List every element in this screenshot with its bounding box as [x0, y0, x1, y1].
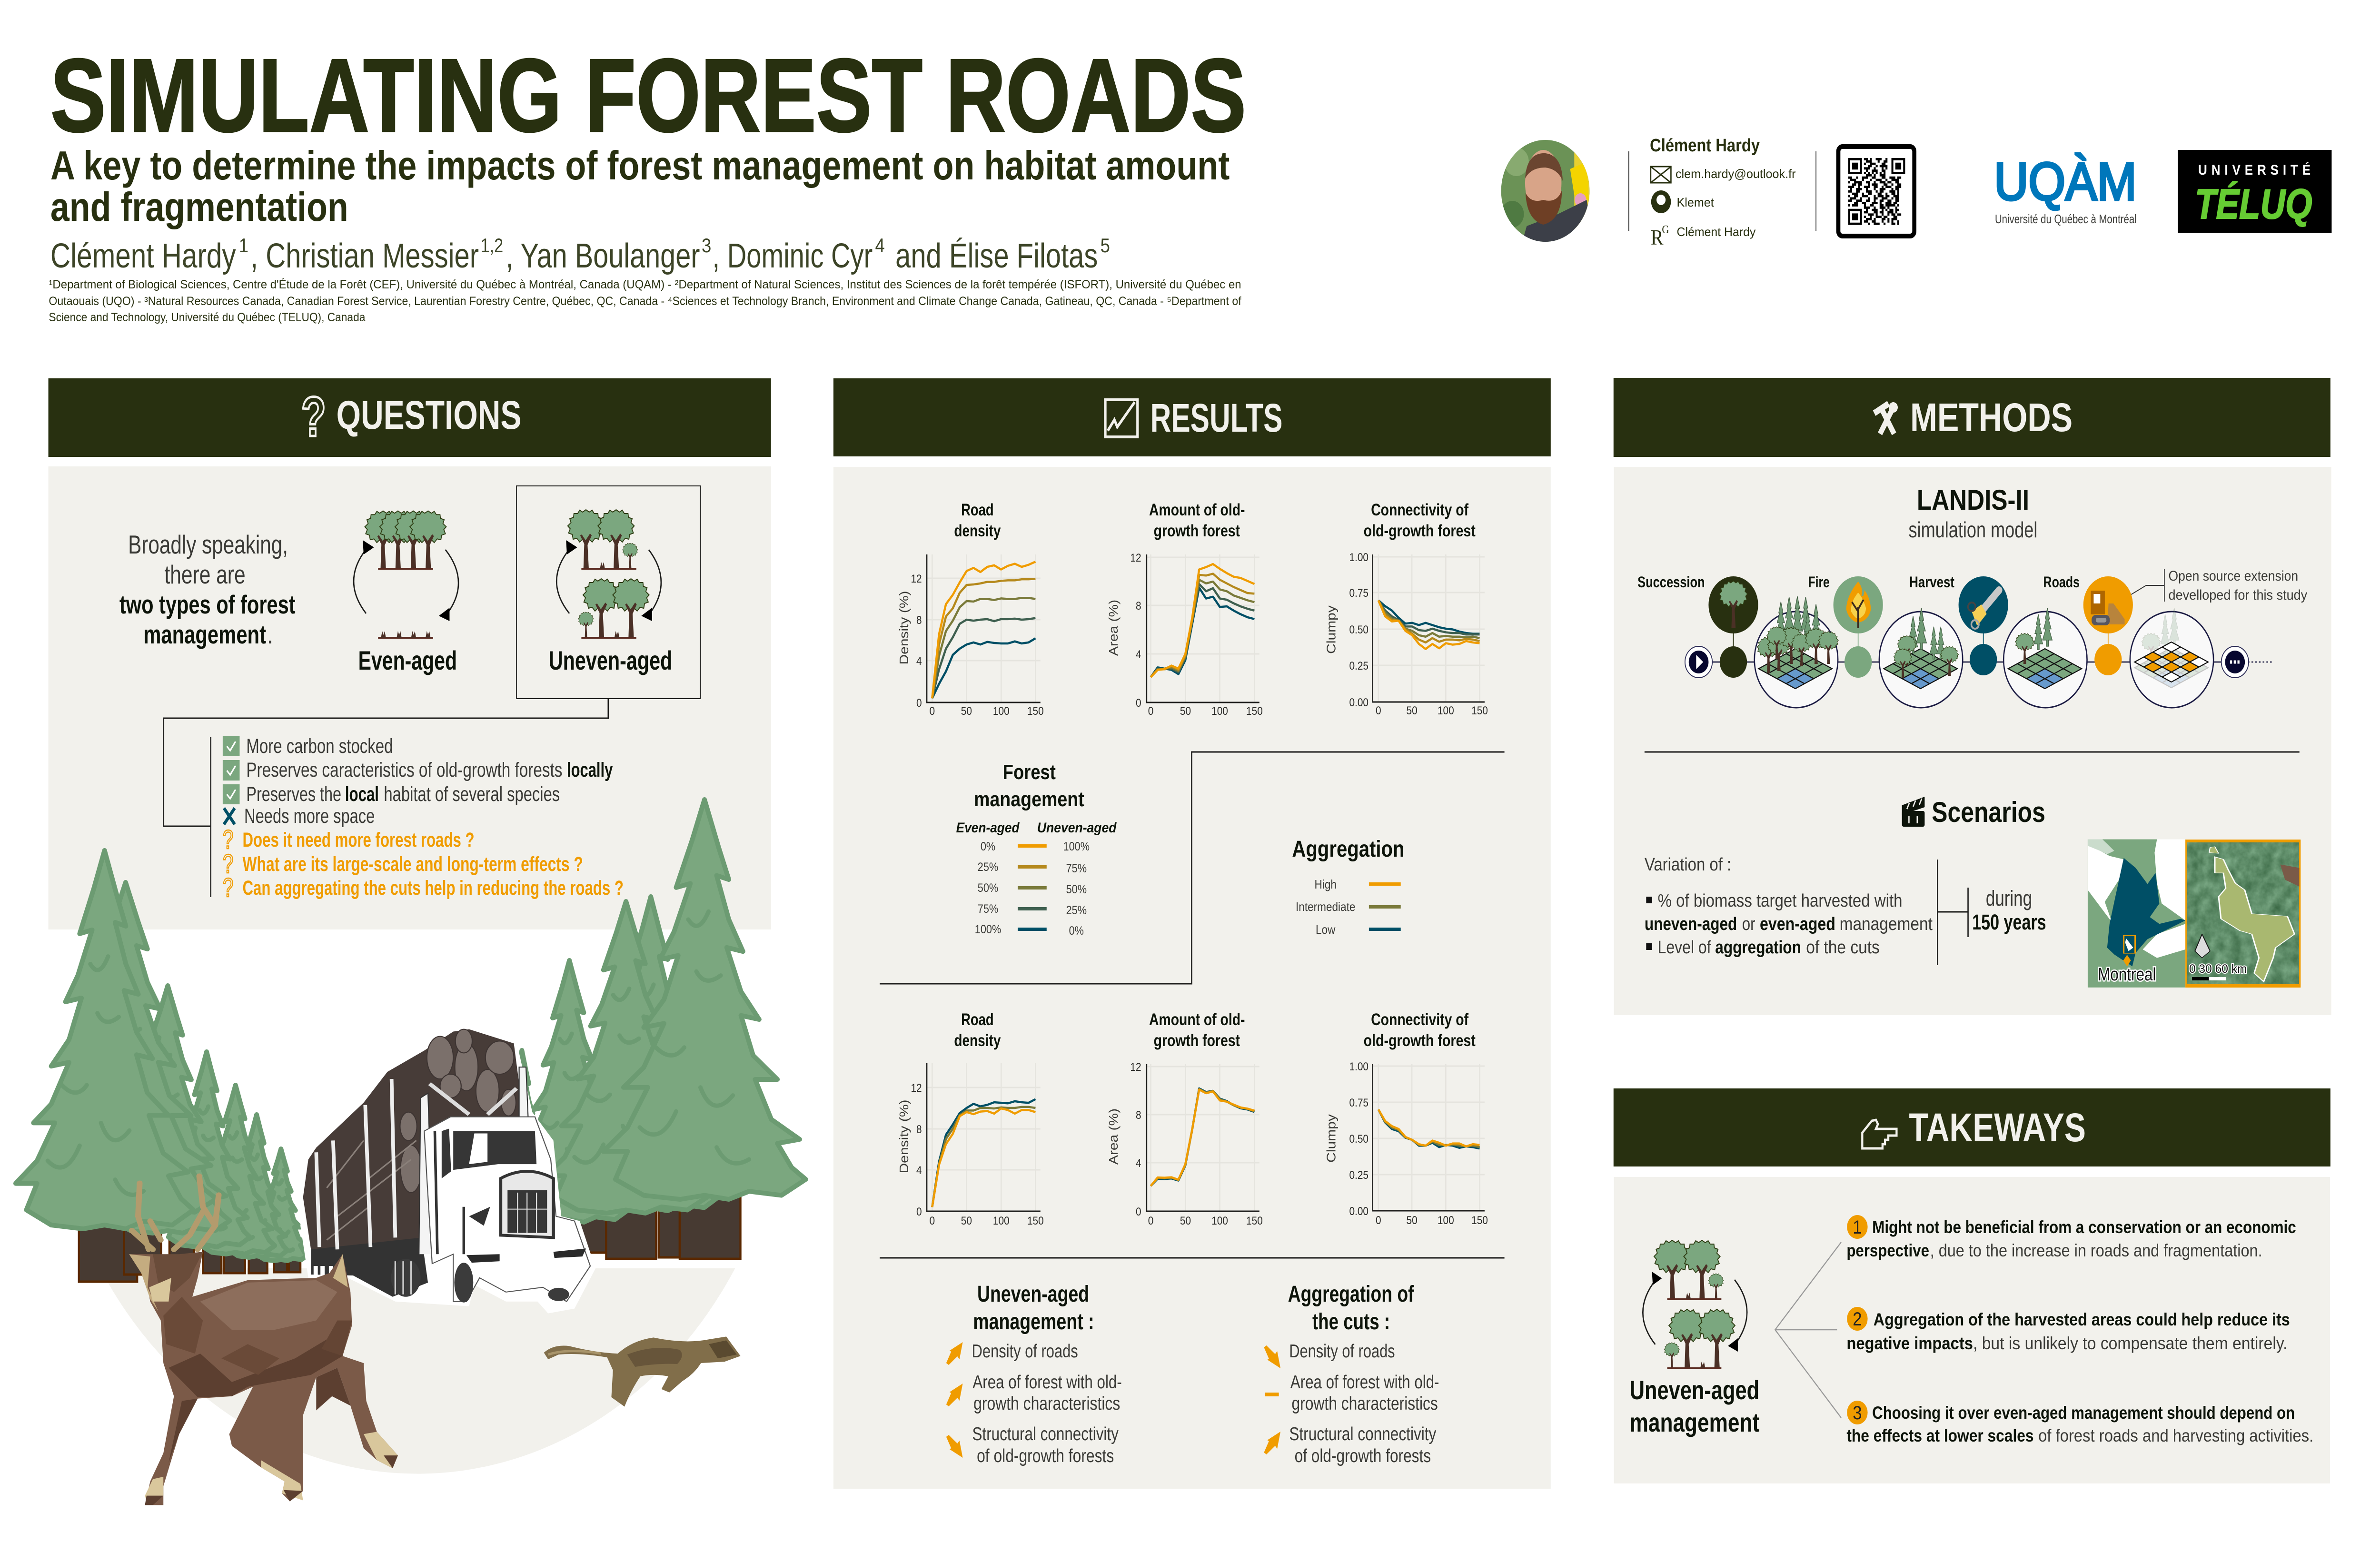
- list: pros and cons: Preserves caracteristics of old-growth forests: [246, 759, 562, 781]
- bracket and duration: [1937, 860, 2046, 965]
- extension note: [2131, 568, 2307, 603]
- legend: forest management: 50%: [1066, 883, 1087, 896]
- chart: road density, forest management: 0: [930, 705, 935, 717]
- list: research questions: ?: [223, 825, 233, 855]
- stage: fire: [1808, 574, 1883, 678]
- chart: road density, forest management: 4: [916, 655, 922, 667]
- chart: amount of old-growth forest, aggregation: 50: [1180, 1215, 1191, 1227]
- model name: LANDIS-II: [1917, 484, 2029, 516]
- takeaway 3: the effects at lower scales: [1846, 1426, 2034, 1446]
- stage: harvest: [1909, 574, 2008, 675]
- uneven-aged box: Uneven-aged: [549, 646, 672, 676]
- chart: road density, aggregation: 0: [916, 1206, 922, 1218]
- chart: connectivity, aggregation: 0: [1376, 1214, 1381, 1226]
- takeaways subject label: [1630, 1376, 1759, 1438]
- takeaways subject label: Uneven-aged: [1630, 1376, 1759, 1405]
- summary: uneven-aged management: Uneven-aged: [977, 1281, 1089, 1307]
- panel: results: [833, 378, 1551, 1489]
- uneven-aged box: [516, 486, 700, 699]
- takeaway 2: Aggregation of the harvested areas could help reduce its: [1874, 1310, 2290, 1330]
- bracket and duration: during: [1986, 886, 2032, 910]
- chart: amount of old-growth forest, aggregation: 100: [1211, 1215, 1228, 1227]
- list: research questions: [223, 825, 624, 903]
- scenarios text: Variation of :: [1645, 854, 1731, 875]
- icon: even-aged cycle: [354, 511, 458, 638]
- contact details: [1629, 135, 1816, 250]
- chart: road density, aggregation: 0: [930, 1215, 935, 1227]
- takeaway 2: negative impacts: [1846, 1334, 1973, 1354]
- takeaway 1: [1846, 1215, 2296, 1261]
- chart: road density, forest management: 50: [961, 705, 972, 717]
- authors: 5: [1101, 235, 1110, 257]
- authors: 1: [239, 235, 248, 257]
- bracket and duration: 150 years: [1972, 910, 2046, 934]
- list: pros and cons: habitat of several species: [384, 783, 560, 806]
- illustration: right forest: [493, 800, 806, 1259]
- list: pros and cons: Needs more space: [244, 805, 375, 828]
- legend: aggregation: Intermediate: [1296, 900, 1355, 914]
- chart: amount of old-growth forest, aggregation: 0: [1136, 1206, 1141, 1218]
- chart: connectivity, aggregation: 0.00: [1349, 1205, 1368, 1217]
- takeaway 3: 3: [1853, 1402, 1862, 1423]
- intro text: Broadly speaking,: [128, 530, 288, 559]
- chart: connectivity, aggregation: 0.75: [1349, 1097, 1368, 1109]
- contact details: Clément Hardy: [1677, 226, 1756, 239]
- contact details: R: [1651, 226, 1664, 250]
- chart: connectivity, forest management: 1.00: [1349, 551, 1368, 563]
- chart titles: bottom row: growth forest: [1154, 1031, 1240, 1049]
- chart: connectivity, aggregation: 50: [1407, 1214, 1418, 1226]
- chart: connectivity, forest management: 0.25: [1349, 660, 1368, 672]
- questions heading: QUESTIONS: [337, 393, 521, 437]
- contact details: G: [1662, 223, 1669, 236]
- chart titles: bottom row: density: [954, 1031, 1001, 1049]
- summary: uneven-aged management: management :: [973, 1308, 1094, 1334]
- stage: harvest: Harvest: [1909, 574, 1954, 591]
- summary: uneven-aged management: [946, 1281, 1122, 1466]
- chart: connectivity, forest management: 0.00: [1349, 696, 1368, 709]
- legend: forest management: [956, 760, 1117, 937]
- chart: amount of old-growth forest, aggregation: 8: [1136, 1109, 1141, 1121]
- stage: roads: [2043, 574, 2133, 675]
- map: study area: 0 30 60 km: [2189, 962, 2247, 975]
- even-aged label: Even-aged: [358, 646, 457, 676]
- scenarios text: aggregation: [1715, 937, 1801, 958]
- stage: roads: Roads: [2043, 574, 2080, 591]
- legend: forest management: 25%: [978, 860, 998, 873]
- summary: aggregation of the cuts: Aggregation of: [1288, 1281, 1414, 1307]
- legend: forest management: 0%: [1069, 924, 1084, 937]
- chart titles: top row: [954, 500, 1476, 540]
- chart: connectivity, aggregation: 1.00: [1349, 1060, 1368, 1073]
- model name: simulation model: [1909, 518, 2037, 543]
- stage: succession: [1637, 574, 1758, 678]
- summary: uneven-aged management: Density of roads: [972, 1341, 1078, 1362]
- list: pros and cons: More carbon stocked: [246, 735, 393, 758]
- divider: [880, 1257, 1505, 1258]
- chart: amount of old-growth forest, forest management: 4: [1136, 648, 1141, 661]
- takeaways heading: [1614, 1088, 2330, 1166]
- illustration: left forest: [16, 850, 308, 1282]
- chart: road density, aggregation: 100: [993, 1215, 1010, 1227]
- logo: TELUQ: UNIVERSITÉ: [2198, 162, 2311, 178]
- scenarios text: or: [1742, 914, 1755, 934]
- questions heading: [49, 378, 771, 457]
- chart: connectivity, forest management: 50: [1407, 704, 1418, 717]
- chart: amount of old-growth forest, forest management: [1107, 552, 1263, 717]
- takeaways subject label: management: [1630, 1408, 1759, 1438]
- illustration: logging truck: [300, 1026, 595, 1314]
- legend: forest management: Forest: [1003, 760, 1056, 784]
- scenarios text: Level of: [1658, 937, 1711, 958]
- chart: connectivity, forest management: 0: [1376, 704, 1381, 717]
- chart titles: top row: Connectivity of: [1371, 500, 1468, 519]
- landscape 3: [2003, 608, 2087, 708]
- subtitle: [50, 143, 1230, 229]
- authors: , Dominic Cyr: [713, 237, 873, 275]
- contact details: Klemet: [1677, 196, 1714, 209]
- authors: 1,2: [481, 235, 503, 257]
- list: research questions: ?: [223, 873, 233, 903]
- summary: aggregation of the cuts: Structural connectivity: [1289, 1423, 1437, 1444]
- results heading: RESULTS: [1150, 395, 1282, 440]
- summary: aggregation of the cuts: growth characteristics: [1292, 1393, 1438, 1414]
- takeaway 3: Choosing it over even-aged management should depend on: [1872, 1404, 2295, 1423]
- chart: amount of old-growth forest, forest management: 0: [1148, 705, 1153, 717]
- legend: forest management: 50%: [978, 881, 998, 894]
- landscape 1: [1755, 596, 1838, 708]
- end node: [2221, 646, 2249, 678]
- list: pros and cons: Preserves the: [246, 783, 341, 806]
- icon: uneven-aged cycle: [1643, 1240, 1747, 1368]
- scenarios text: management: [1840, 914, 1933, 934]
- authors: Clément Hardy: [50, 237, 236, 275]
- intro text: there are: [164, 560, 246, 589]
- takeaway 2: , but is unlikely to compensate them entirely.: [1973, 1334, 2288, 1354]
- authors: 4: [875, 235, 885, 257]
- contact details: Clément Hardy: [1650, 135, 1760, 156]
- legend: aggregation: [1292, 836, 1405, 937]
- chart: connectivity, aggregation: 0.25: [1349, 1169, 1368, 1181]
- scenarios text: of the cuts: [1806, 937, 1880, 958]
- chart: road density, aggregation: 12: [911, 1082, 922, 1094]
- subtitle: A key to determine the impacts of forest management on habitat amount: [50, 143, 1230, 188]
- chart: road density, aggregation: [897, 1063, 1044, 1227]
- affiliations: [49, 278, 1241, 324]
- chart: connectivity, forest management: Clumpy: [1324, 605, 1338, 654]
- authors: and Élise Filotas: [895, 237, 1098, 275]
- chart: road density, aggregation: 150: [1027, 1215, 1044, 1227]
- legend: forest management: Even-aged: [956, 820, 1020, 835]
- affiliations: ¹Department of Biological Sciences, Centre d'Étude de la Forêt (CEF), Université du Québec à Montréal, Canada (UQAM) - ²Department of Natural Sciences, Institut des Sciences de la forêt tempérée (ISFORT), Université du Québec en: [49, 278, 1241, 291]
- illustration: deer: [129, 1176, 398, 1505]
- chart: amount of old-growth forest, forest management: 12: [1130, 552, 1141, 564]
- chart: road density, forest management: Density (%): [897, 591, 911, 664]
- summary: aggregation of the cuts: of old-growth forests: [1295, 1445, 1431, 1466]
- chart: connectivity, aggregation: [1324, 1060, 1488, 1226]
- chart: amount of old-growth forest, aggregation: 0: [1148, 1215, 1153, 1227]
- chart: amount of old-growth forest, forest management: 150: [1246, 705, 1263, 717]
- methods heading: METHODS: [1910, 395, 2073, 440]
- chart: amount of old-growth forest, forest management: Area (%): [1107, 600, 1121, 656]
- legend: forest management: 100%: [975, 923, 1001, 936]
- chart titles: top row: growth forest: [1154, 521, 1240, 540]
- takeaway 1: , due to the increase in roads and fragmentation.: [1930, 1241, 2262, 1261]
- list: research questions: Can aggregating the cuts help in reducing the roads ?: [243, 877, 624, 900]
- chart: road density, forest management: 8: [916, 614, 922, 626]
- timeline line: [1699, 633, 2273, 662]
- extension note: develloped for this study: [2169, 587, 2307, 603]
- chart: amount of old-growth forest, forest management: 100: [1211, 705, 1228, 717]
- illustration: marten: [544, 1336, 741, 1407]
- author photo: [1501, 140, 1590, 242]
- chart: road density, forest management: 12: [911, 573, 922, 585]
- play node: [1685, 646, 1712, 678]
- model name: [1909, 484, 2037, 543]
- chart: connectivity, aggregation: Clumpy: [1324, 1114, 1338, 1163]
- chart: connectivity, forest management: [1324, 551, 1488, 717]
- map: study area: [2185, 840, 2301, 988]
- chart: road density, aggregation: Density (%): [897, 1100, 911, 1173]
- chart: road density, forest management: [897, 554, 1044, 717]
- summary: uneven-aged management: growth characteristics: [973, 1393, 1120, 1414]
- chart: road density, forest management: 150: [1027, 705, 1044, 717]
- landscape 4: [2130, 608, 2213, 708]
- authors: 3: [702, 235, 711, 257]
- summary: aggregation of the cuts: Density of roads: [1289, 1341, 1395, 1362]
- fan connector: [1775, 1242, 1841, 1418]
- panel: methods: [1614, 378, 2331, 1015]
- stage: succession: Succession: [1637, 574, 1705, 591]
- legend: forest management: 75%: [978, 902, 998, 915]
- intro text: [119, 530, 296, 649]
- chart: road density, aggregation: 4: [916, 1164, 922, 1176]
- extension note: Open source extension: [2169, 568, 2298, 583]
- list: pros and cons: [223, 735, 613, 828]
- affiliations: Science and Technology, Université du Québec (TELUQ), Canada: [49, 311, 366, 324]
- chart titles: top row: old-growth forest: [1364, 521, 1476, 540]
- chart: connectivity, forest management: 0.50: [1349, 623, 1368, 636]
- summary: aggregation of the cuts: Area of forest with old-: [1290, 1372, 1439, 1393]
- connector: [164, 699, 608, 897]
- summary: aggregation of the cuts: the cuts :: [1312, 1308, 1390, 1334]
- legend: forest management: 25%: [1066, 904, 1087, 917]
- stage: fire: Fire: [1808, 574, 1830, 591]
- takeaway 1: 1: [1853, 1216, 1862, 1238]
- chart: amount of old-growth forest, aggregation: 4: [1136, 1157, 1141, 1169]
- affiliations: Outaouais (UQO) - ³Natural Resources Canada, Canadian Forest Service, Laurentian Forestry Centre, Québec, QC, Canada - ⁴Sciences et Technology Branch, Environment and Climate Change Canada, Gatineau, QC, Canada - ⁵Department of: [49, 295, 1241, 307]
- chart titles: bottom row: old-growth forest: [1364, 1031, 1476, 1049]
- chart: amount of old-growth forest, aggregation: Area (%): [1107, 1108, 1121, 1165]
- methods heading: [1614, 378, 2330, 457]
- chart: amount of old-growth forest, aggregation: [1107, 1061, 1263, 1227]
- list: pros and cons: locally: [567, 759, 613, 781]
- intro text: two types of forest: [119, 590, 296, 619]
- legend: forest management: Uneven-aged: [1037, 820, 1117, 835]
- summary: aggregation of the cuts: [1264, 1281, 1439, 1466]
- map: Quebec location: [2088, 840, 2185, 988]
- logo: UQAM: UQÀM: [1994, 152, 2137, 212]
- chart: connectivity, forest management: 100: [1438, 704, 1454, 717]
- takeaway 2: 2: [1853, 1308, 1862, 1330]
- questions heading: ?: [301, 386, 326, 448]
- chart titles: bottom row: Connectivity of: [1371, 1010, 1468, 1028]
- legend: forest management: 100%: [1063, 840, 1090, 853]
- scenarios text: % of biomass target harvested with: [1658, 890, 1903, 911]
- chart: amount of old-growth forest, forest management: 8: [1136, 600, 1141, 612]
- authors: , Christian Messier: [250, 237, 479, 275]
- logo: UQAM: Université du Québec à Montréal: [1995, 213, 2137, 226]
- chart titles: bottom row: Road: [961, 1010, 994, 1028]
- list: research questions: ?: [223, 850, 233, 879]
- chart: amount of old-growth forest, aggregation: 150: [1246, 1215, 1263, 1227]
- chart titles: top row: Amount of old-: [1149, 500, 1245, 519]
- list: pros and cons: local: [345, 783, 379, 806]
- authors: [50, 235, 1110, 275]
- map: Quebec location: Montreal: [2098, 964, 2156, 985]
- legend: forest management: management: [974, 787, 1084, 811]
- scenarios heading: Scenarios: [1932, 796, 2045, 828]
- chart titles: top row: density: [954, 521, 1001, 540]
- chart titles: top row: Road: [961, 500, 994, 519]
- summary: uneven-aged management: Area of forest with old-: [972, 1372, 1122, 1393]
- chart titles: bottom row: Amount of old-: [1149, 1010, 1245, 1028]
- scenarios text: uneven-aged: [1645, 914, 1737, 934]
- logo: TELUQ: [2178, 150, 2331, 233]
- takeaway 3: of forest roads and harvesting activities.: [2038, 1426, 2313, 1446]
- chart: amount of old-growth forest, forest management: 0: [1136, 697, 1141, 709]
- subtitle: and fragmentation: [50, 184, 348, 229]
- scenarios text: even-aged: [1760, 914, 1835, 934]
- takeaway 2: [1846, 1307, 2290, 1354]
- takeaways heading: TAKEWAYS: [1909, 1105, 2086, 1150]
- takeaway 3: [1846, 1401, 2313, 1446]
- chart: road density, forest management: 0: [916, 697, 922, 709]
- results heading: [833, 378, 1551, 456]
- panel: takeaways: [1614, 1088, 2330, 1483]
- legend: aggregation: Low: [1316, 923, 1336, 937]
- chart: connectivity, aggregation: 150: [1471, 1214, 1488, 1226]
- intro text: .: [267, 620, 273, 649]
- intro text: management: [143, 620, 266, 649]
- legend: forest management: 0%: [981, 840, 995, 853]
- chart: road density, aggregation: 50: [961, 1215, 972, 1227]
- title: SIMULATING FOREST ROADS: [50, 37, 1246, 154]
- legend: aggregation: High: [1315, 878, 1337, 891]
- legend: forest management: 75%: [1066, 862, 1087, 875]
- chart: amount of old-growth forest, aggregation: 12: [1130, 1061, 1141, 1073]
- contact details: clem.hardy@outlook.fr: [1676, 168, 1796, 181]
- summary: uneven-aged management: Structural connectivity: [972, 1423, 1119, 1444]
- illustration: road ground: [100, 1268, 735, 1474]
- summary: uneven-aged management: of old-growth forests: [977, 1445, 1114, 1466]
- QR code: [1838, 147, 1914, 236]
- chart: connectivity, forest management: 150: [1471, 704, 1488, 717]
- chart titles: bottom row: [954, 1010, 1476, 1049]
- chart: road density, aggregation: 8: [916, 1123, 922, 1136]
- list: research questions: Does it need more forest roads ?: [243, 829, 475, 851]
- panel: questions: [49, 378, 771, 929]
- takeaway 1: perspective: [1846, 1241, 1929, 1261]
- chart: connectivity, forest management: 0.75: [1349, 587, 1368, 599]
- chart: connectivity, aggregation: 0.50: [1349, 1133, 1368, 1145]
- scenarios text: [1645, 854, 1933, 958]
- landscape 2: [1879, 608, 1963, 708]
- chart: amount of old-growth forest, forest management: 50: [1180, 705, 1191, 717]
- logo: TELUQ: TÉLUQ: [2195, 181, 2312, 227]
- legend: aggregation: Aggregation: [1292, 836, 1405, 862]
- authors: , Yan Boulanger: [506, 237, 700, 275]
- chart: connectivity, aggregation: 100: [1438, 1214, 1454, 1226]
- chart: road density, forest management: 100: [993, 705, 1010, 717]
- takeaway 1: Might not be beneficial from a conservation or an economic: [1872, 1218, 2296, 1237]
- divider lines around legend: [880, 752, 1505, 984]
- list: research questions: What are its large-scale and long-term effects ?: [243, 853, 583, 876]
